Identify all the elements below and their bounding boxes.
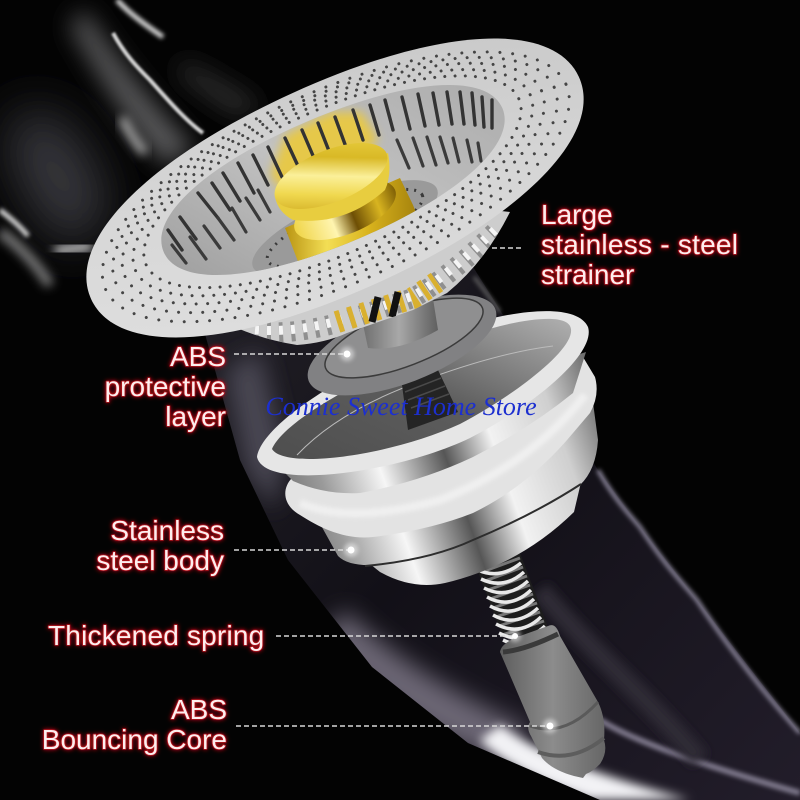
label: ABS bouncing core: ABS xyxy=(171,694,227,725)
label: stainless steel body: steel body xyxy=(96,545,224,576)
label: large stainless steel strainer: stainless - steel xyxy=(541,229,738,260)
label: ABS protective layer: protective xyxy=(105,371,226,402)
gold knob xyxy=(274,143,416,261)
basket interior xyxy=(161,85,505,275)
thickened spring xyxy=(478,553,550,645)
cup rim xyxy=(257,311,589,475)
large stainless steel strainer xyxy=(86,38,584,345)
knob top face xyxy=(274,143,388,209)
label: ABS bouncing core xyxy=(42,694,557,755)
label: ABS protective layer: layer xyxy=(165,401,226,432)
label: stainless steel body xyxy=(96,515,358,576)
perforation rings xyxy=(100,50,571,324)
cup interior xyxy=(272,319,571,459)
knob ring xyxy=(294,182,396,240)
label: thickened spring xyxy=(48,620,521,651)
label: ABS protective layer: ABS xyxy=(170,341,226,372)
label: large stainless steel strainer xyxy=(492,199,738,290)
basket outside xyxy=(241,211,510,345)
watermark: Connie Sweet Home Store xyxy=(265,392,537,421)
label: ABS protective layer xyxy=(105,341,354,432)
label: large stainless steel strainer: strainer xyxy=(541,259,634,290)
label: large stainless steel strainer: Large xyxy=(541,199,613,230)
threaded stem xyxy=(402,370,458,430)
ABS bouncing core xyxy=(500,625,605,778)
knob body xyxy=(285,178,416,261)
label: thickened spring: Thickened spring xyxy=(48,620,264,651)
rim plate xyxy=(48,0,622,394)
steel foot xyxy=(365,478,582,585)
silicone ring xyxy=(285,357,597,537)
knob disc side xyxy=(275,153,389,221)
stainless steel body xyxy=(257,311,598,585)
ABS protective layer xyxy=(295,274,509,416)
steel body band xyxy=(318,395,598,565)
steel band under rim xyxy=(284,352,586,493)
label: stainless steel body: Stainless xyxy=(110,515,224,546)
label: ABS bouncing core: Bouncing Core xyxy=(42,724,227,755)
